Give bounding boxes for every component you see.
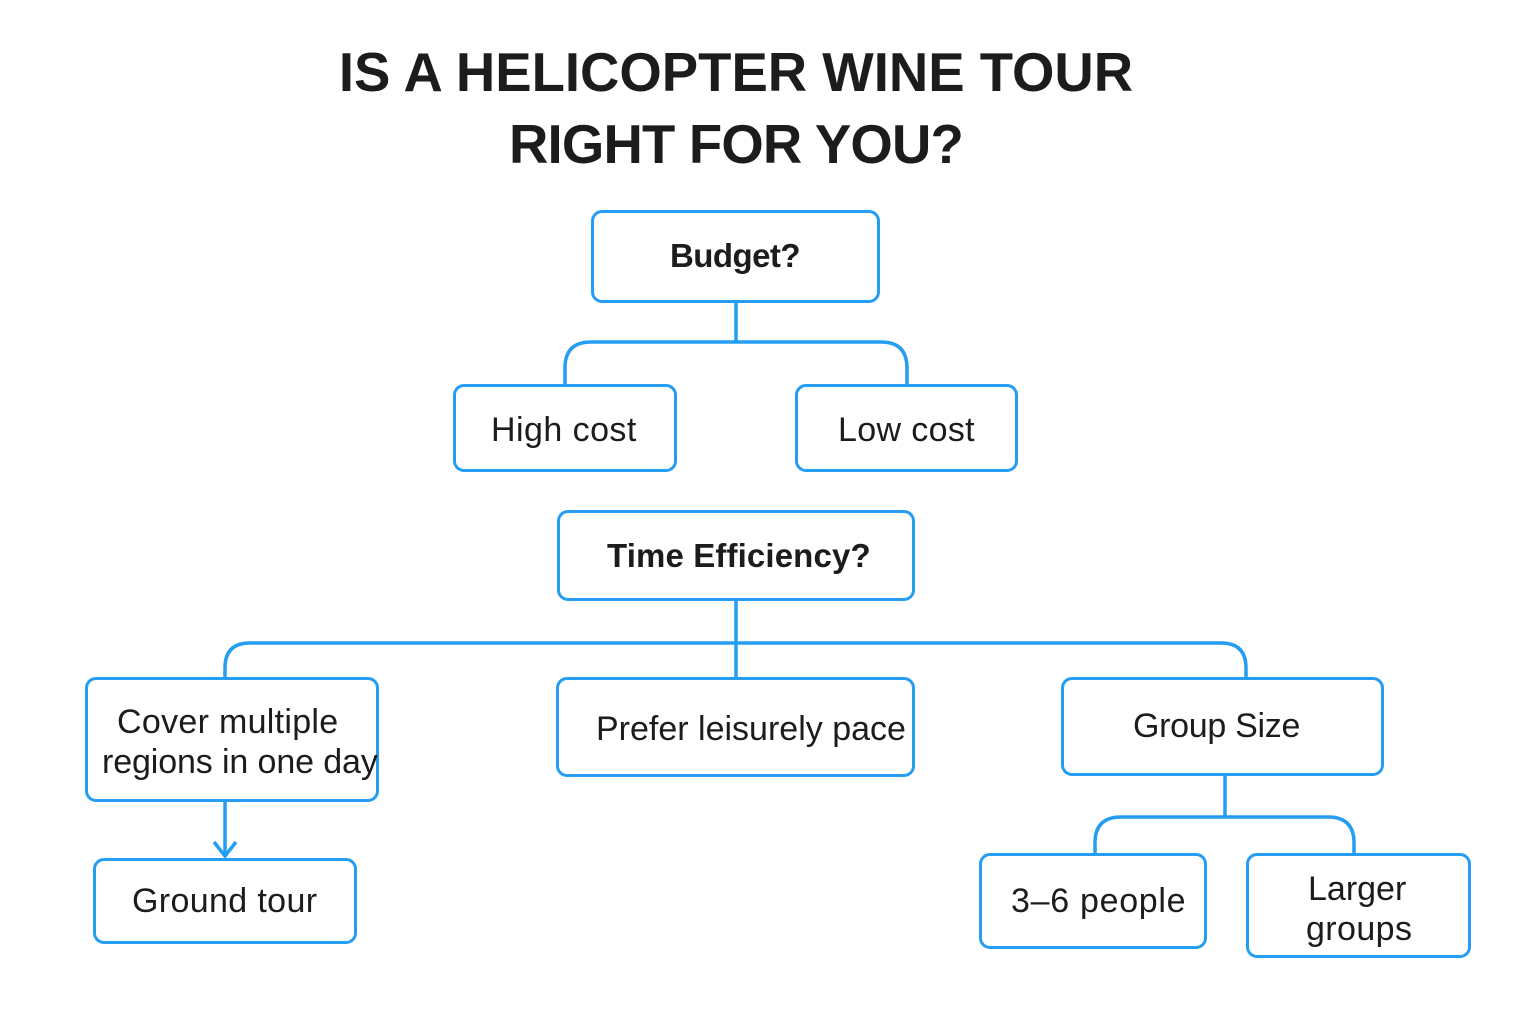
label: Low cost: Low cost bbox=[838, 411, 975, 449]
label: Budget: Budget? bbox=[670, 237, 800, 274]
box: Time Efficiency bbox=[557, 510, 915, 601]
label: Time Efficiency: Time Efficiency? bbox=[607, 537, 871, 574]
title: IS A HELICOPTER WINE TOUR bbox=[339, 42, 1133, 103]
box: High cost bbox=[453, 384, 677, 472]
box: 3–6 people bbox=[979, 853, 1207, 949]
label: Larger groups: groups bbox=[1306, 910, 1412, 948]
title: RIGHT FOR YOU? bbox=[509, 114, 963, 175]
box: Larger groups bbox=[1246, 853, 1471, 958]
label: Prefer leisurely pace: Prefer leisurely pace bbox=[596, 710, 906, 748]
label: Cover multiple regions: Cover multiple bbox=[117, 703, 338, 741]
box: Group Size bbox=[1061, 677, 1384, 776]
box: Low cost bbox=[795, 384, 1018, 472]
label: Ground tour: Ground tour bbox=[132, 882, 317, 920]
label: Larger groups bbox=[1306, 870, 1412, 948]
box: Cover multiple regions bbox=[85, 677, 379, 802]
label: Group Size: Group Size bbox=[1133, 707, 1300, 745]
title bbox=[339, 42, 1133, 175]
label: Cover multiple regions bbox=[102, 703, 378, 781]
box: Prefer leisurely pace bbox=[556, 677, 915, 777]
label: High cost: High cost bbox=[491, 411, 637, 449]
box: Budget bbox=[591, 210, 880, 303]
label: 3–6 people: 3–6 people bbox=[1011, 882, 1186, 920]
box: Ground tour bbox=[93, 858, 357, 944]
label: Cover multiple regions: regions in one day bbox=[102, 743, 378, 781]
label: Larger groups: Larger bbox=[1308, 870, 1406, 908]
